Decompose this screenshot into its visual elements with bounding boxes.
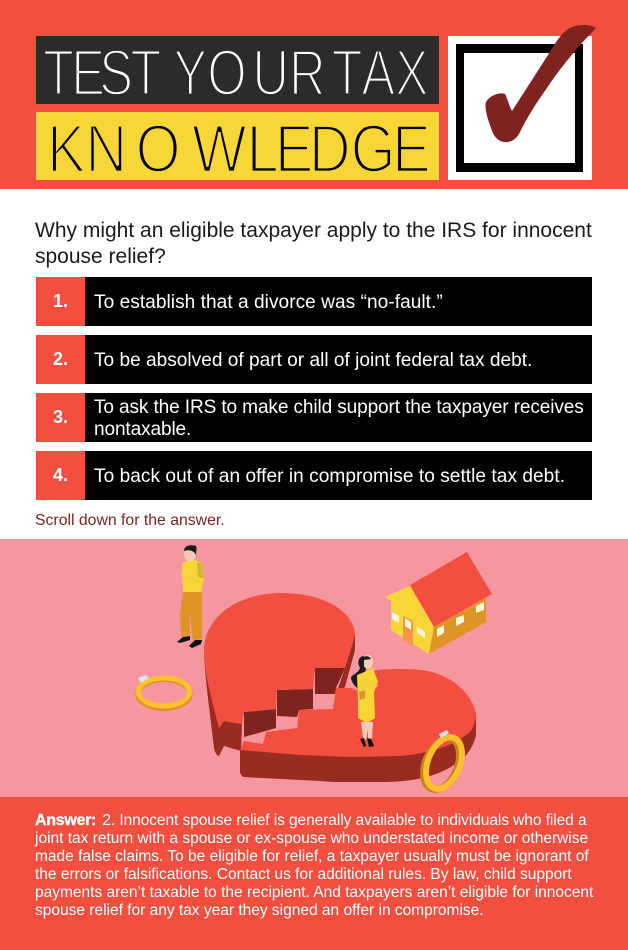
question heading: Why might an eligible taxpayer apply to the IRS for innocent — [35, 218, 592, 242]
broken heart lower piece — [240, 669, 476, 782]
answer text: payments aren’t taxable to the recipient. And taxpayers aren’t eligible for innocent — [35, 884, 593, 900]
option 2: To be absolved of part or all of joint federal tax debt. — [94, 350, 532, 371]
option 1: To establish that a divorce was “no-fault.” — [94, 292, 443, 313]
answer text: Answer: 2. Innocent spouse relief is generally available to individuals who filed a — [35, 812, 587, 828]
icon: house — [385, 552, 492, 654]
question heading: spouse relief? — [35, 244, 166, 268]
illustration panel: broken heart, couple, house, rings — [0, 539, 628, 797]
figure: man — [177, 545, 204, 648]
answer panel — [0, 797, 628, 950]
option 3 — [36, 393, 592, 442]
answer text — [34, 812, 594, 918]
title: test your tax knowledge — [36, 36, 439, 180]
option 4 — [36, 451, 592, 500]
icon: right ring — [416, 730, 469, 795]
icon: left ring — [138, 675, 190, 708]
option 3: nontaxable. — [94, 419, 191, 440]
answer text: the errors or falsifications. Contact us for additional rules. By law, child support — [35, 866, 572, 882]
option 2: 2. — [53, 349, 68, 369]
broken heart upper piece — [204, 593, 355, 756]
icon: checkbox with check mark — [448, 25, 596, 180]
title: test your tax knowledge: TEST YOUR TAX — [43, 37, 429, 109]
option 3: To ask the IRS to make child support the taxpayer receives — [94, 397, 584, 418]
answer text: spouse relief for any tax year they signed an offer in compromise. — [35, 902, 484, 918]
figure: woman — [351, 655, 378, 747]
question heading — [35, 218, 592, 268]
option 4: To back out of an offer in compromise to settle tax debt. — [94, 466, 565, 487]
option 2 — [36, 335, 592, 384]
option 1 — [36, 277, 592, 326]
option 1: 1. — [53, 291, 68, 311]
answer text: made false claims. To be eligible for relief, a taxpayer usually must be ignorant of — [35, 848, 589, 864]
header banner — [0, 0, 628, 189]
option 4: 4. — [53, 465, 68, 485]
option 3: 3. — [53, 407, 68, 427]
scroll down note: Scroll down for the answer. — [35, 512, 225, 529]
answer text: joint tax return with a spouse or ex-spouse who understated income or otherwise — [35, 830, 588, 846]
